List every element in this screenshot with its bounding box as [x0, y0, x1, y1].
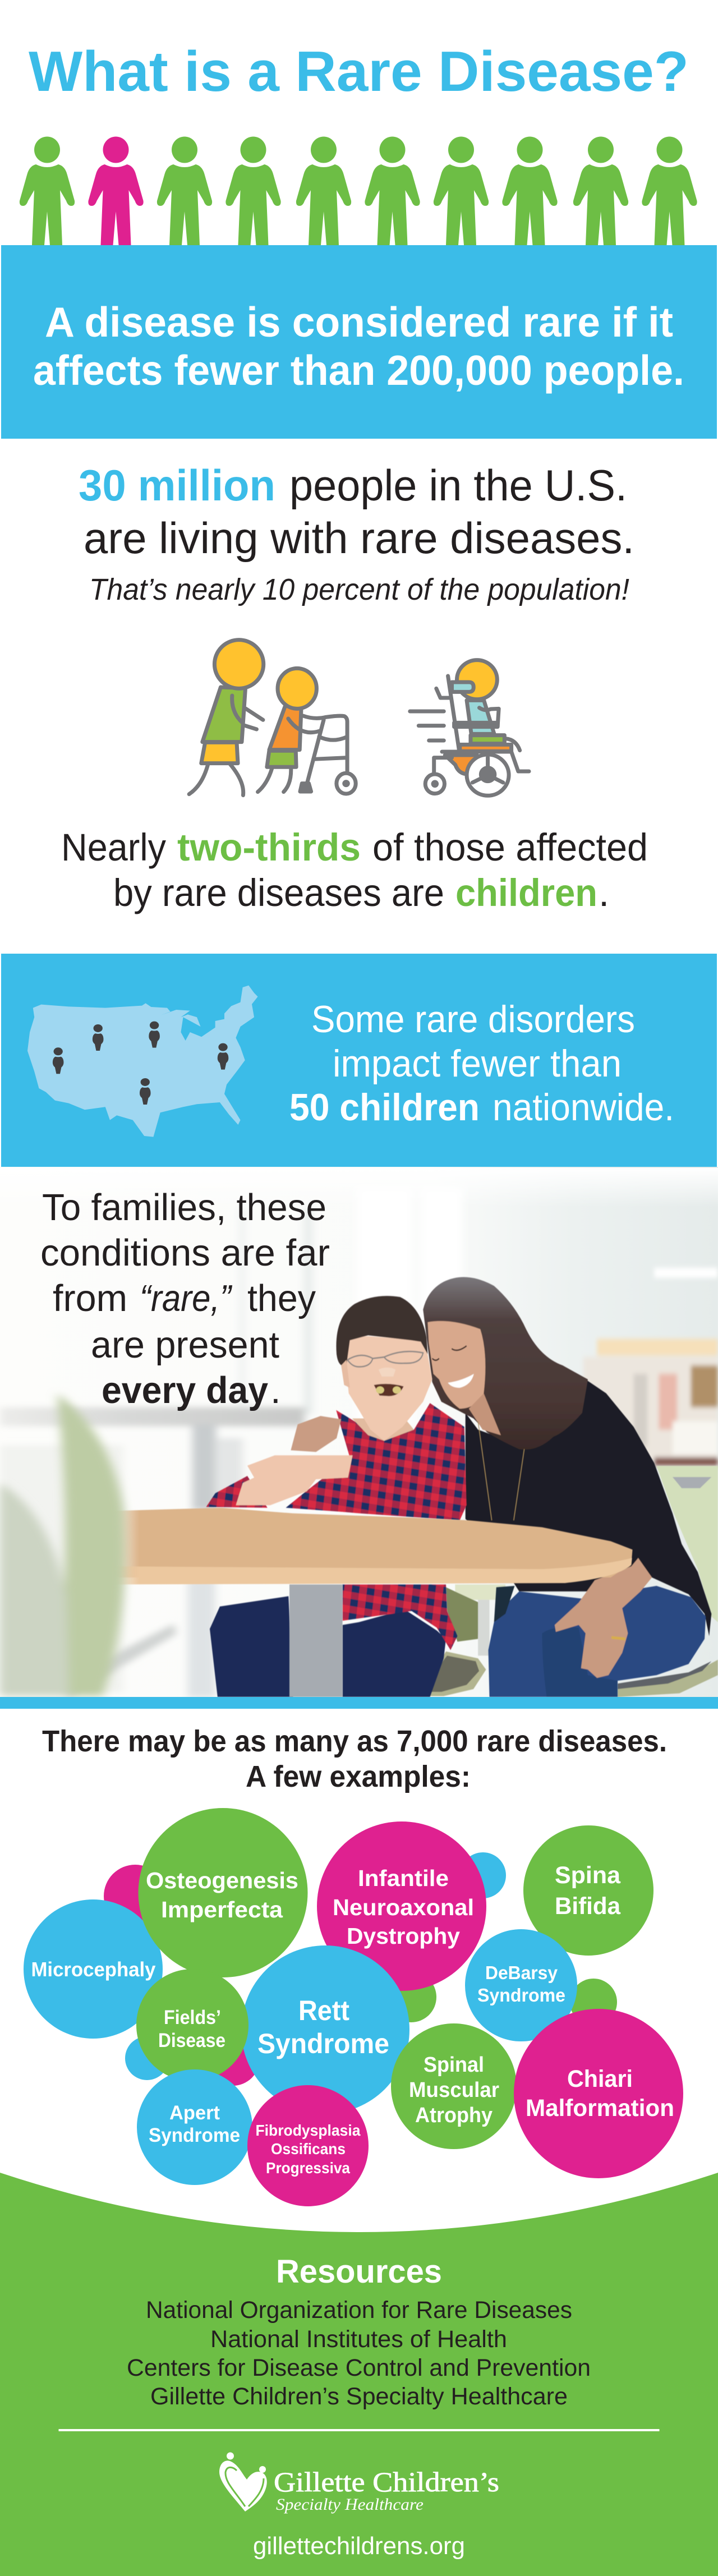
- bubble: Fibrodysplasia Ossificans Progressiva: Progressiva: [266, 2159, 350, 2177]
- photo caption text: .: [270, 1369, 281, 1411]
- icon: heart with figures: [219, 2453, 267, 2511]
- bubble: Infantile Neuroaxonal Dystrophy: Neuroaxonal: [333, 1894, 474, 1920]
- bubble: DeBarsy Syndrome: Syndrome: [477, 1985, 565, 2005]
- bubble: DeBarsy Syndrome: [465, 1929, 577, 2041]
- statistic: two-thirds are children: by rare diseases are: [113, 871, 444, 914]
- resources list: [127, 2297, 591, 2410]
- banner text: impact fewer than: [333, 1042, 622, 1085]
- logo: Gillette Children's Specialty Healthcare: Gillette Children’s: [274, 2466, 499, 2497]
- panel: definition banner: [1, 245, 717, 439]
- strip below photo: [0, 1697, 718, 1709]
- bubble: Osteogenesis Imperfecta: Imperfecta: [161, 1897, 283, 1922]
- soft white fade at top of photo: [0, 1168, 718, 1207]
- resources list: National Organization for Rare Diseases: [146, 2297, 572, 2324]
- resources list: Centers for Disease Control and Prevention: [127, 2354, 591, 2381]
- bubble: Microcephaly: Microcephaly: [31, 1958, 156, 1981]
- bubble: Fibrodysplasia Ossificans Progressiva: Fibrodysplasia: [256, 2122, 361, 2139]
- bubble: Fibrodysplasia Ossificans Progressiva: [247, 2085, 369, 2206]
- resources list: Gillette Children’s Specialty Healthcare: [150, 2383, 568, 2410]
- bubble: Infantile Neuroaxonal Dystrophy: Dystrophy: [347, 1923, 460, 1949]
- highlighted person icon: [88, 137, 144, 245]
- chairs: [416, 1466, 718, 1697]
- bubble: Spina Bifida: Spina: [555, 1862, 621, 1889]
- banner text: 50 children: [289, 1086, 480, 1129]
- italic note: That’s nearly 10 percent of the population!: [89, 573, 629, 606]
- statistic: two-thirds are children: Nearly: [61, 826, 166, 869]
- bubble: Fields' Disease: Disease: [158, 2030, 225, 2051]
- bubble: Spina Bifida: Bifida: [555, 1893, 621, 1920]
- person icons: [20, 137, 697, 245]
- photo caption text: are present: [91, 1324, 279, 1366]
- photo caption text: [40, 1186, 330, 1411]
- statistic: two-thirds are children: .: [599, 871, 609, 914]
- banner text: [289, 998, 674, 1129]
- photo: mother and son laughing at a table: [0, 1167, 718, 1698]
- chart: map of the United States with people markers: [27, 986, 258, 1137]
- bubble: Spina Bifida: [523, 1825, 653, 1956]
- statistic: 30 million: 30 million: [79, 461, 275, 510]
- statistic: 30 million: are living with rare diseases.: [84, 513, 634, 563]
- photo caption text: To families, these: [42, 1186, 326, 1229]
- bubble chart: rare disease examples: [24, 1808, 683, 2206]
- bubble: DeBarsy Syndrome: DeBarsy: [485, 1962, 558, 1983]
- logo: Gillette Children's Specialty Healthcare: Specialty Healthcare: [276, 2495, 424, 2514]
- table: [107, 1508, 633, 1697]
- heading: resources: Resources: [276, 2253, 442, 2290]
- bubble: Spinal Muscular Atrophy: Atrophy: [415, 2104, 493, 2127]
- heading: examples: [42, 1724, 667, 1793]
- photo caption text: every day: [102, 1369, 268, 1411]
- icon: child in wheelchair: [410, 660, 529, 795]
- bubble: Chiari Malformation: Malformation: [526, 2095, 674, 2122]
- bubble: Apert Syndrome: [137, 2069, 252, 2185]
- photo caption text: from: [53, 1277, 127, 1319]
- statistic: two-thirds are children: of those affected: [372, 826, 648, 869]
- bubble: Infantile Neuroaxonal Dystrophy: [317, 1821, 486, 1991]
- bubble: Spinal Muscular Atrophy: Muscular: [409, 2078, 499, 2102]
- resources list: National Institutes of Health: [210, 2326, 507, 2353]
- website url: gillettechildrens.org: [253, 2532, 465, 2560]
- statistic: 30 million: [79, 461, 634, 563]
- blurred plant in foreground: [0, 1393, 125, 1696]
- banner text: A disease is considered rare if it: [45, 298, 673, 346]
- photo caption text: conditions are far: [40, 1232, 330, 1274]
- bubble: Fibrodysplasia Ossificans Progressiva: Ossificans: [271, 2140, 346, 2158]
- banner text: nationwide.: [493, 1086, 674, 1129]
- bubble: Apert Syndrome: Syndrome: [149, 2124, 240, 2146]
- mother: [423, 1277, 711, 1697]
- bubble: Rett Syndrome: Rett: [298, 1995, 349, 2026]
- banner text: [33, 298, 684, 394]
- logo: Gillette Children's Specialty Healthcare: [219, 2453, 499, 2514]
- bubble: Fields' Disease: Fields’: [164, 2007, 221, 2028]
- banner text: affects fewer than 200,000 people.: [33, 347, 684, 394]
- statistic: two-thirds are children: [61, 826, 648, 914]
- statistic: 30 million: people in the U.S.: [289, 461, 627, 510]
- banner text: Some rare disorders: [311, 998, 635, 1041]
- row of ten people icons, one highlighted: [20, 137, 697, 245]
- statistic: two-thirds are children: children: [455, 871, 597, 914]
- bubble: Osteogenesis Imperfecta: Osteogenesis: [146, 1867, 298, 1893]
- heading: examples: A few examples:: [246, 1760, 471, 1793]
- photo caption text: “rare,”: [140, 1277, 232, 1319]
- bubble: Apert Syndrome: Apert: [169, 2102, 220, 2124]
- decorative small bubbles: [104, 1852, 617, 2086]
- bubble: Chiari Malformation: Chiari: [567, 2066, 633, 2092]
- photo caption text: they: [247, 1277, 316, 1319]
- bubble: Osteogenesis Imperfecta: [138, 1808, 307, 1977]
- bottom panel: green resources area with curved top: [0, 2173, 718, 2576]
- statistic: two-thirds are children: two-thirds: [177, 826, 361, 869]
- photo background: [0, 1167, 718, 1698]
- panel: nationwide banner: [1, 954, 717, 1167]
- bubble: Spinal Muscular Atrophy: [391, 2023, 517, 2149]
- bubble: Infantile Neuroaxonal Dystrophy: Infantile: [358, 1865, 449, 1891]
- heading: examples: There may be as many as 7,000 rare diseases.: [42, 1724, 667, 1758]
- bubble: Microcephaly: [24, 1899, 163, 2039]
- boy: [206, 1296, 467, 1697]
- icon: adult and child with walker: [189, 640, 356, 795]
- title: What is a Rare Disease?: [29, 40, 689, 103]
- bubble: Rett Syndrome: Syndrome: [257, 2028, 389, 2059]
- bubble: Rett Syndrome: [241, 1945, 409, 2114]
- bubble: Spinal Muscular Atrophy: Spinal: [424, 2053, 484, 2077]
- bubble: Chiari Malformation: [514, 2009, 683, 2178]
- photo subjects: [107, 1268, 718, 1697]
- bubble: Fields' Disease: [136, 1969, 248, 2081]
